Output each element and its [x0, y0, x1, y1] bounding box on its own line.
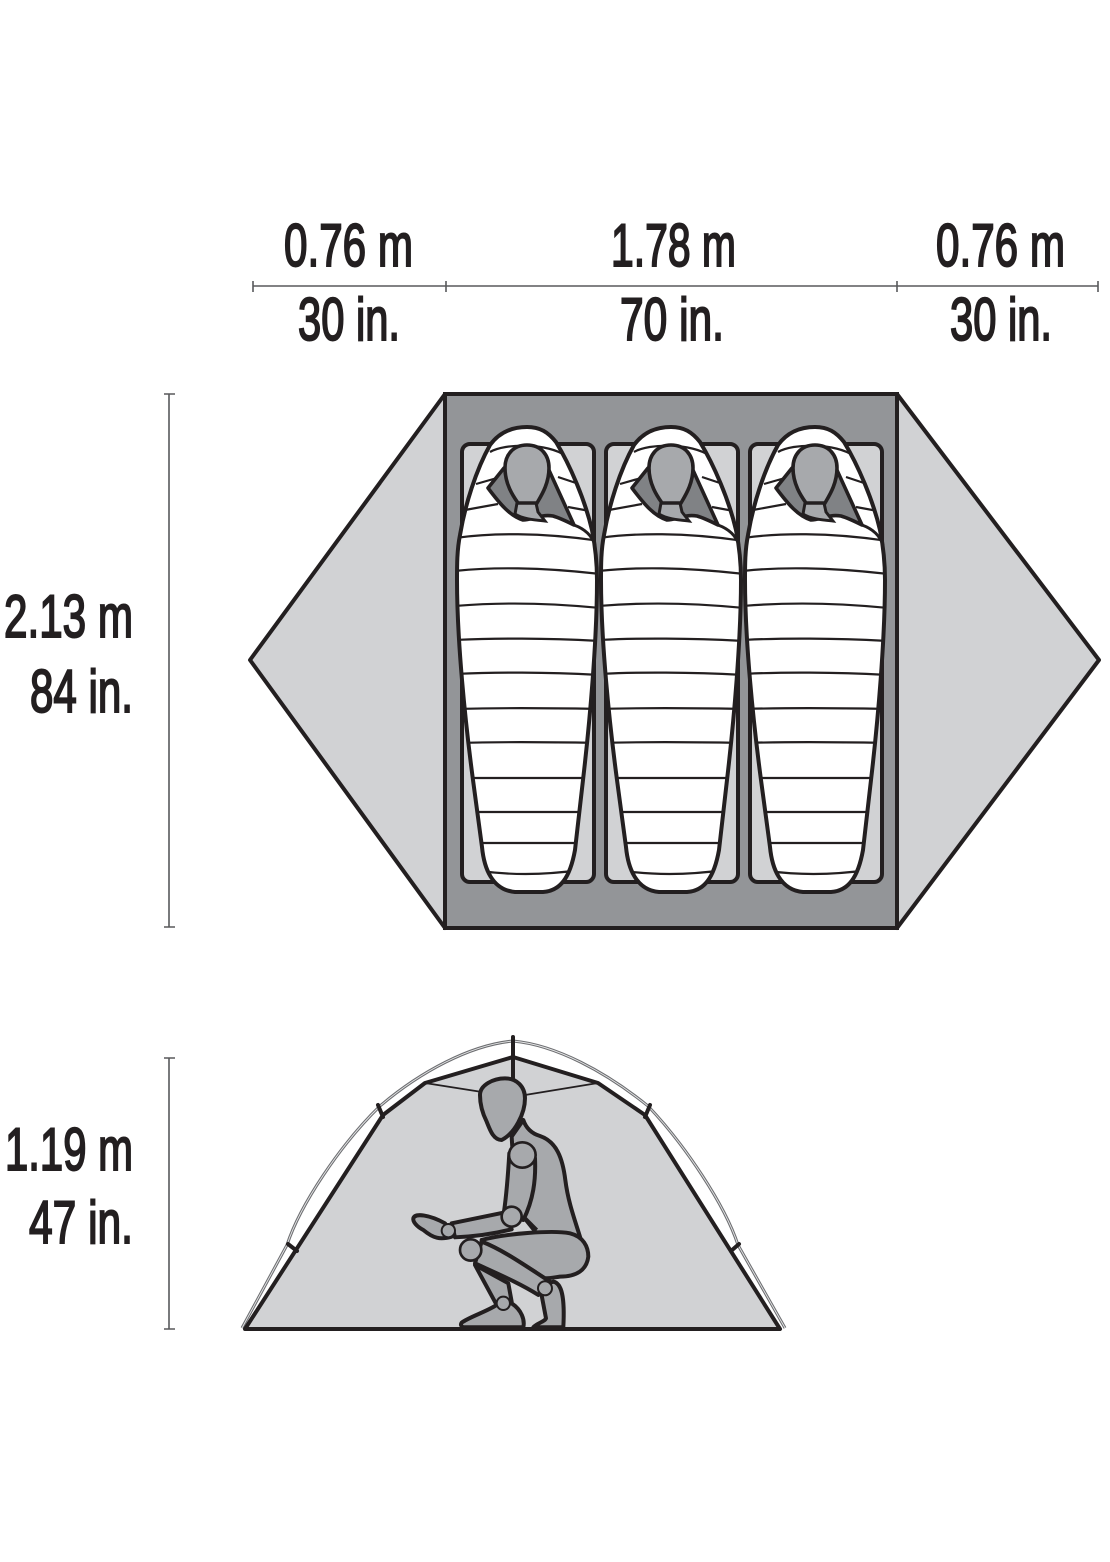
width labels: 30 in.: [950, 286, 1052, 353]
side view of tent: [242, 1037, 785, 1329]
head: [480, 1078, 525, 1140]
height dimension line: [164, 1058, 175, 1329]
wrist joint: [442, 1224, 455, 1237]
ankle joint: [497, 1297, 510, 1310]
height labels: 47 in.: [29, 1189, 133, 1256]
width labels: 70 in.: [620, 286, 724, 353]
upper arm: [504, 1153, 535, 1220]
length dimension line: [164, 394, 175, 927]
width labels: 30 in.: [298, 286, 400, 353]
length labels: [4, 583, 133, 725]
front shin: [475, 1265, 512, 1305]
shoulder joint: [509, 1142, 536, 1168]
width labels: [284, 212, 1065, 353]
knee joint: [460, 1239, 481, 1261]
ground line: [245, 1327, 780, 1331]
rainfly: [242, 1041, 785, 1328]
sleeper 3: [743, 427, 888, 892]
elbow joint: [502, 1207, 522, 1227]
floor plan of tent: [250, 394, 1099, 928]
inner tent body: [245, 1057, 780, 1329]
width labels: 1.78 m: [611, 212, 736, 279]
sleeper 1: [455, 427, 600, 892]
sleeper 2: [599, 427, 744, 892]
tent dimensions diagram: [5, 222, 1101, 1331]
rear knee joint: [538, 1281, 552, 1295]
length labels: 2.13 m: [4, 583, 133, 650]
length labels: 84 in.: [30, 658, 133, 725]
right vestibule: [897, 394, 1099, 928]
torso: [512, 1120, 581, 1240]
front foot: [461, 1303, 524, 1327]
hand: [413, 1215, 452, 1238]
rear leg: [533, 1282, 564, 1327]
forearm: [452, 1213, 512, 1237]
left vestibule: [250, 394, 445, 928]
width dimension line: [253, 281, 1098, 292]
tent floor: [445, 394, 897, 928]
height labels: 1.19 m: [5, 1116, 133, 1183]
seated figure: [413, 1078, 588, 1327]
width labels: 0.76 m: [284, 212, 413, 279]
height labels: [5, 1116, 133, 1256]
hip and rear thigh: [482, 1232, 588, 1278]
front thigh: [475, 1242, 550, 1295]
ridge pole and guy lines: [288, 1037, 739, 1251]
